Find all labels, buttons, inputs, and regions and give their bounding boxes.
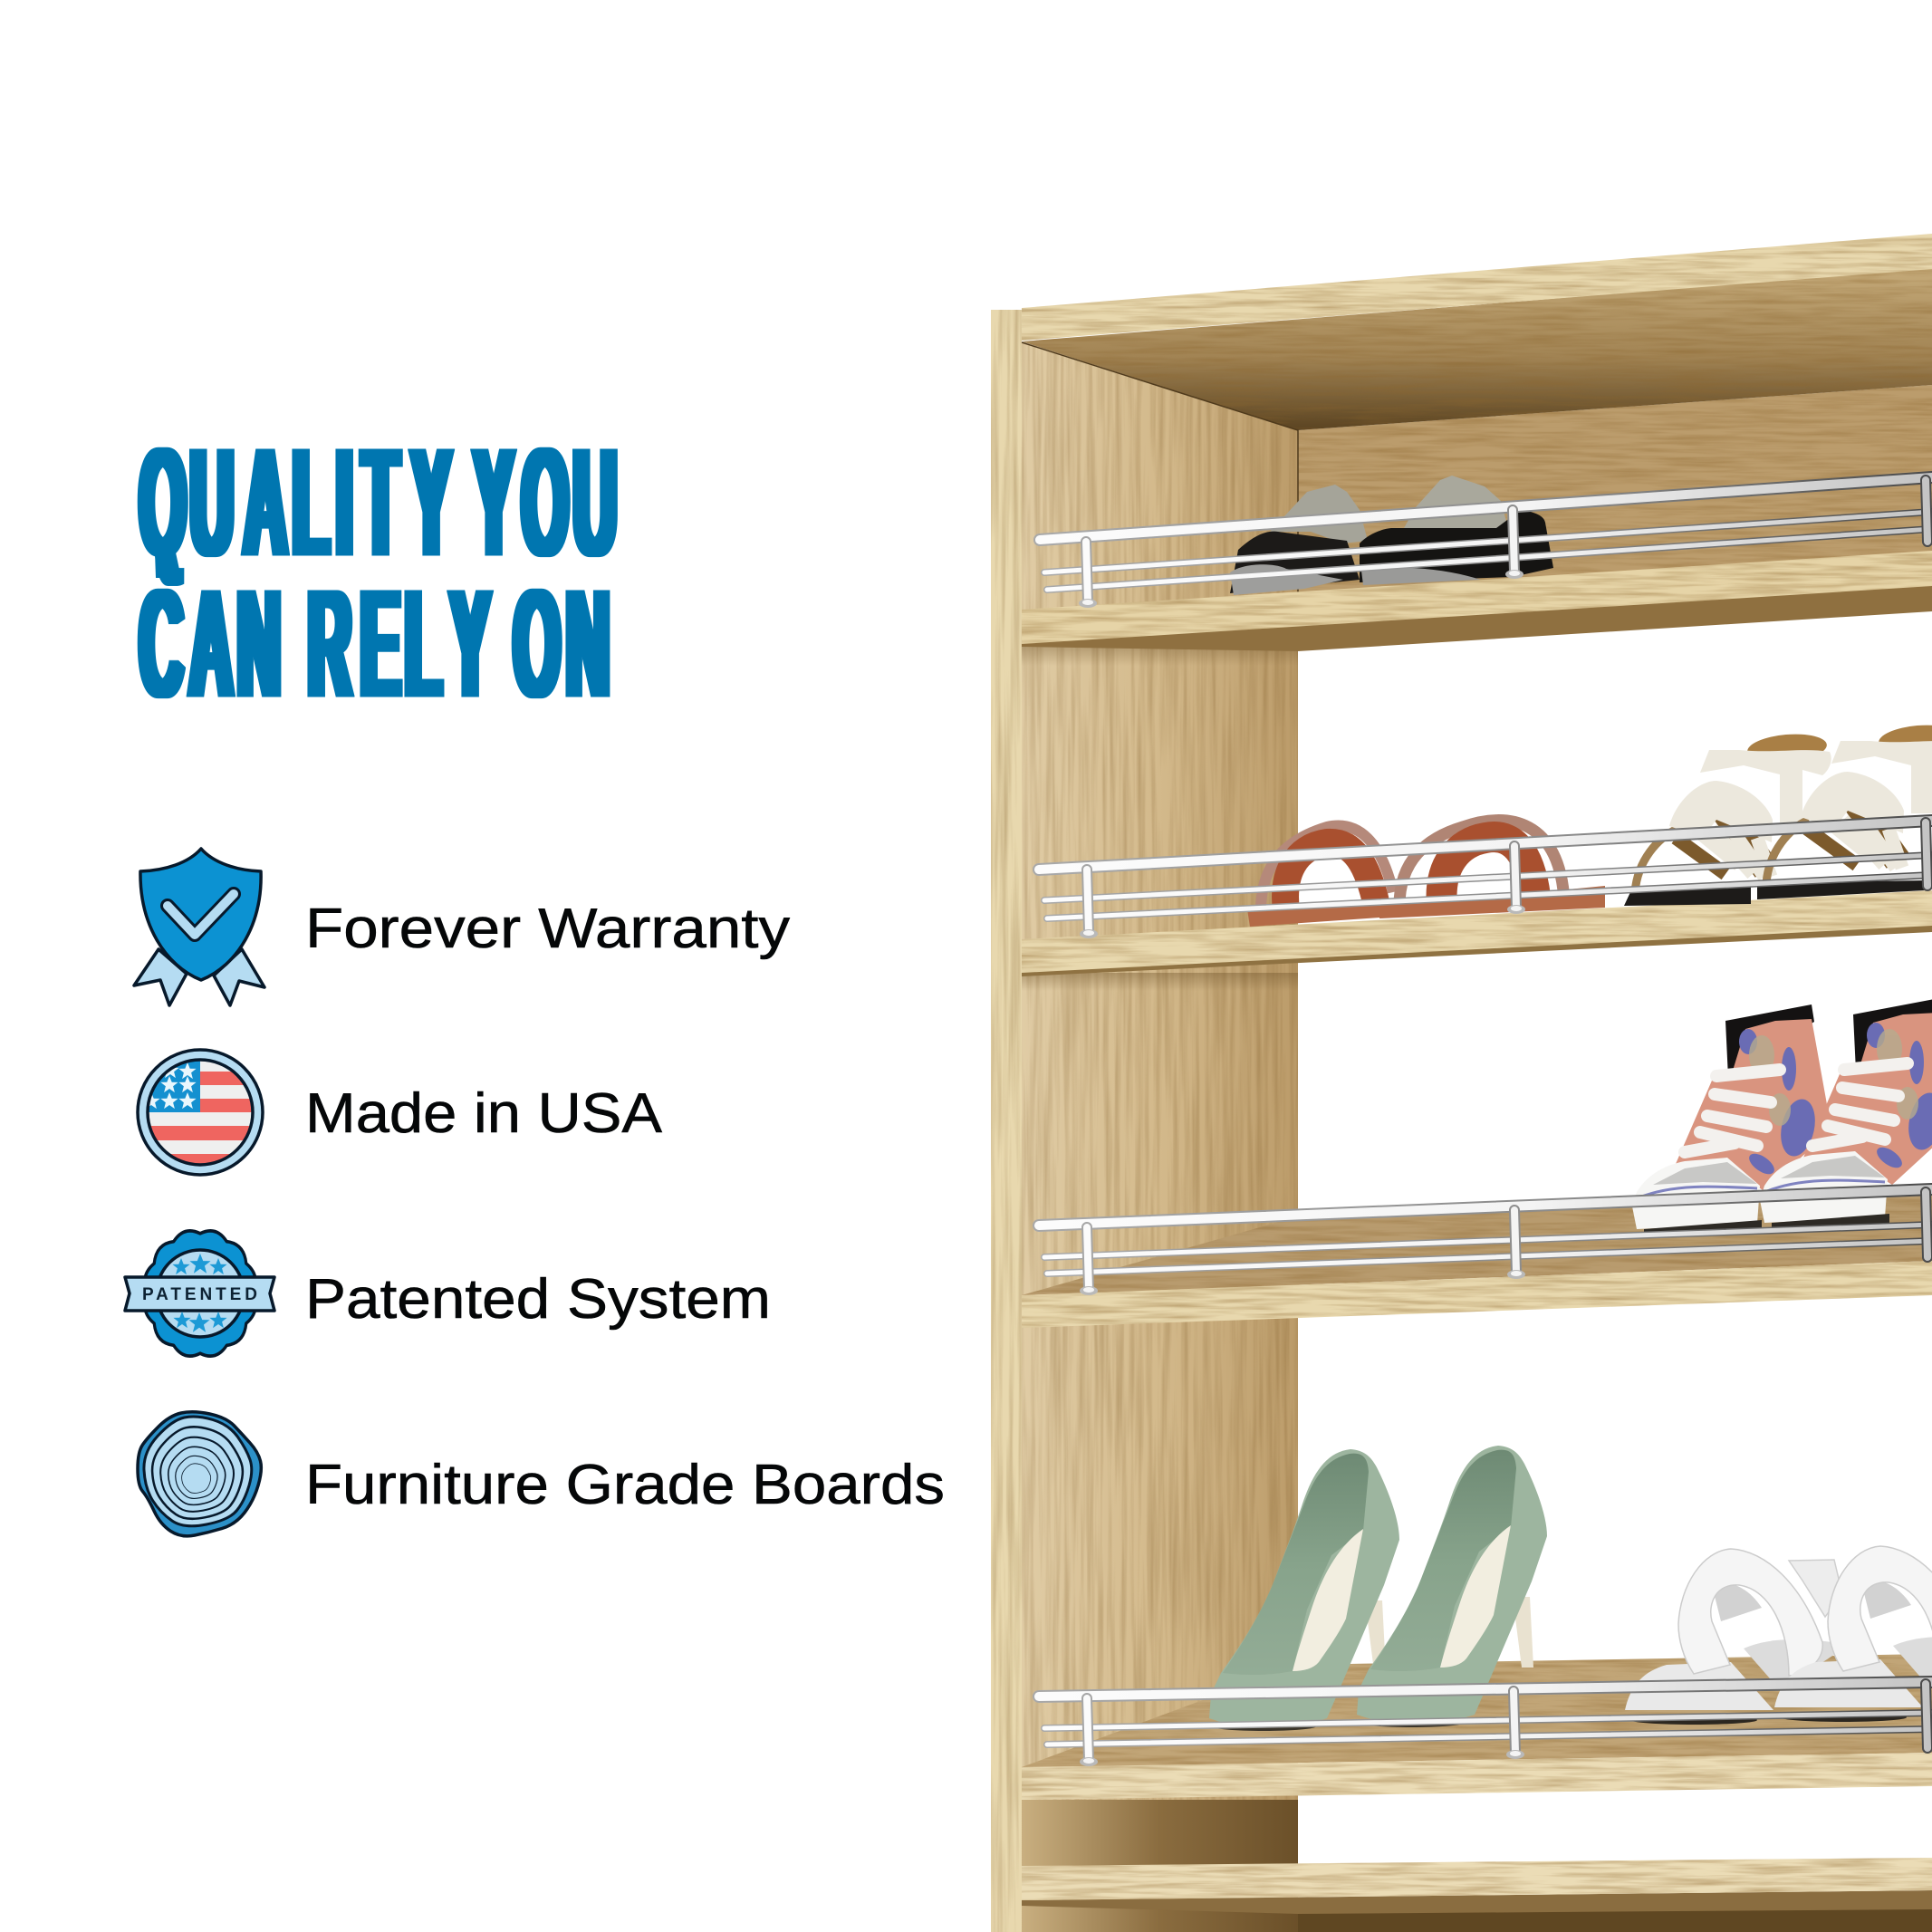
- left post: [991, 310, 1022, 1932]
- shoe shelf unit: [991, 234, 1932, 1932]
- feature: made in usa: [138, 1050, 663, 1175]
- icon: patented seal: [125, 1231, 274, 1356]
- shelf 2 underside: [1022, 924, 1932, 976]
- shoes: floral high tops: [1632, 1004, 1831, 1234]
- side panel: [1022, 342, 1298, 1932]
- title: [139, 417, 617, 730]
- shoe: white sandal: [1635, 731, 1831, 892]
- shelf 1 underside: [1022, 583, 1932, 651]
- shelf 4 chrome rail: [1039, 1682, 1932, 1766]
- shelf 3 front: [1022, 1261, 1932, 1328]
- shoe: second heel: [1357, 1446, 1547, 1727]
- panel seam: [1022, 342, 1298, 616]
- shoe: second white sandal: [1766, 722, 1932, 883]
- shelf 1 chrome rail: [1040, 477, 1932, 608]
- shelf 4 surface: [1022, 1654, 1932, 1767]
- icon: patented seal: PATENTED: [142, 1285, 257, 1304]
- shoes: white sandal soles: [1624, 880, 1925, 906]
- feature: furniture grade boards: [138, 1412, 945, 1536]
- shoe: second white sandal: [1774, 1546, 1932, 1722]
- icon: shield with ribbons: [134, 849, 264, 1005]
- icon: wood rings: [138, 1412, 261, 1536]
- back panel: [1298, 385, 1932, 616]
- top board: [1022, 234, 1932, 341]
- lower back panel: [1298, 1902, 1932, 1932]
- title: QUALITY YOU: [139, 417, 617, 589]
- shelf 2 chrome rail: [1039, 821, 1932, 938]
- shelf 1 front: [1022, 551, 1932, 644]
- shelf 4 front: [1022, 1753, 1932, 1800]
- text: made in usa: Made in USA: [305, 1082, 663, 1145]
- text: forever warranty: Forever Warranty: [305, 898, 790, 960]
- feature list: [125, 849, 945, 1536]
- feature: forever warranty: [134, 849, 790, 1005]
- top underside: [1022, 268, 1932, 430]
- shoes: brown sandals: [1247, 821, 1605, 927]
- shoe: second high top: [1760, 998, 1932, 1227]
- shelf 3 surface: [1022, 1196, 1932, 1295]
- shelf 5 underside: [1022, 1890, 1932, 1914]
- shelf 5 front: [1022, 1858, 1932, 1900]
- text: furniture grade boards: Furniture Grade Boards: [305, 1454, 945, 1516]
- feature: patented system: [125, 1231, 771, 1356]
- shoes: white strappy sandals: [1625, 1549, 1848, 1725]
- title: CAN RELY ON: [139, 558, 610, 730]
- shelf 2 front: [1022, 890, 1932, 973]
- shoes: green heels: [1209, 1449, 1399, 1731]
- text: patented system: Patented System: [305, 1268, 771, 1331]
- shelf 3 chrome rail: [1039, 1189, 1932, 1295]
- shoes: dark sneakers: [1230, 476, 1553, 595]
- icon: american flag badge: [138, 1050, 263, 1175]
- panel shadows: [1022, 644, 1298, 1932]
